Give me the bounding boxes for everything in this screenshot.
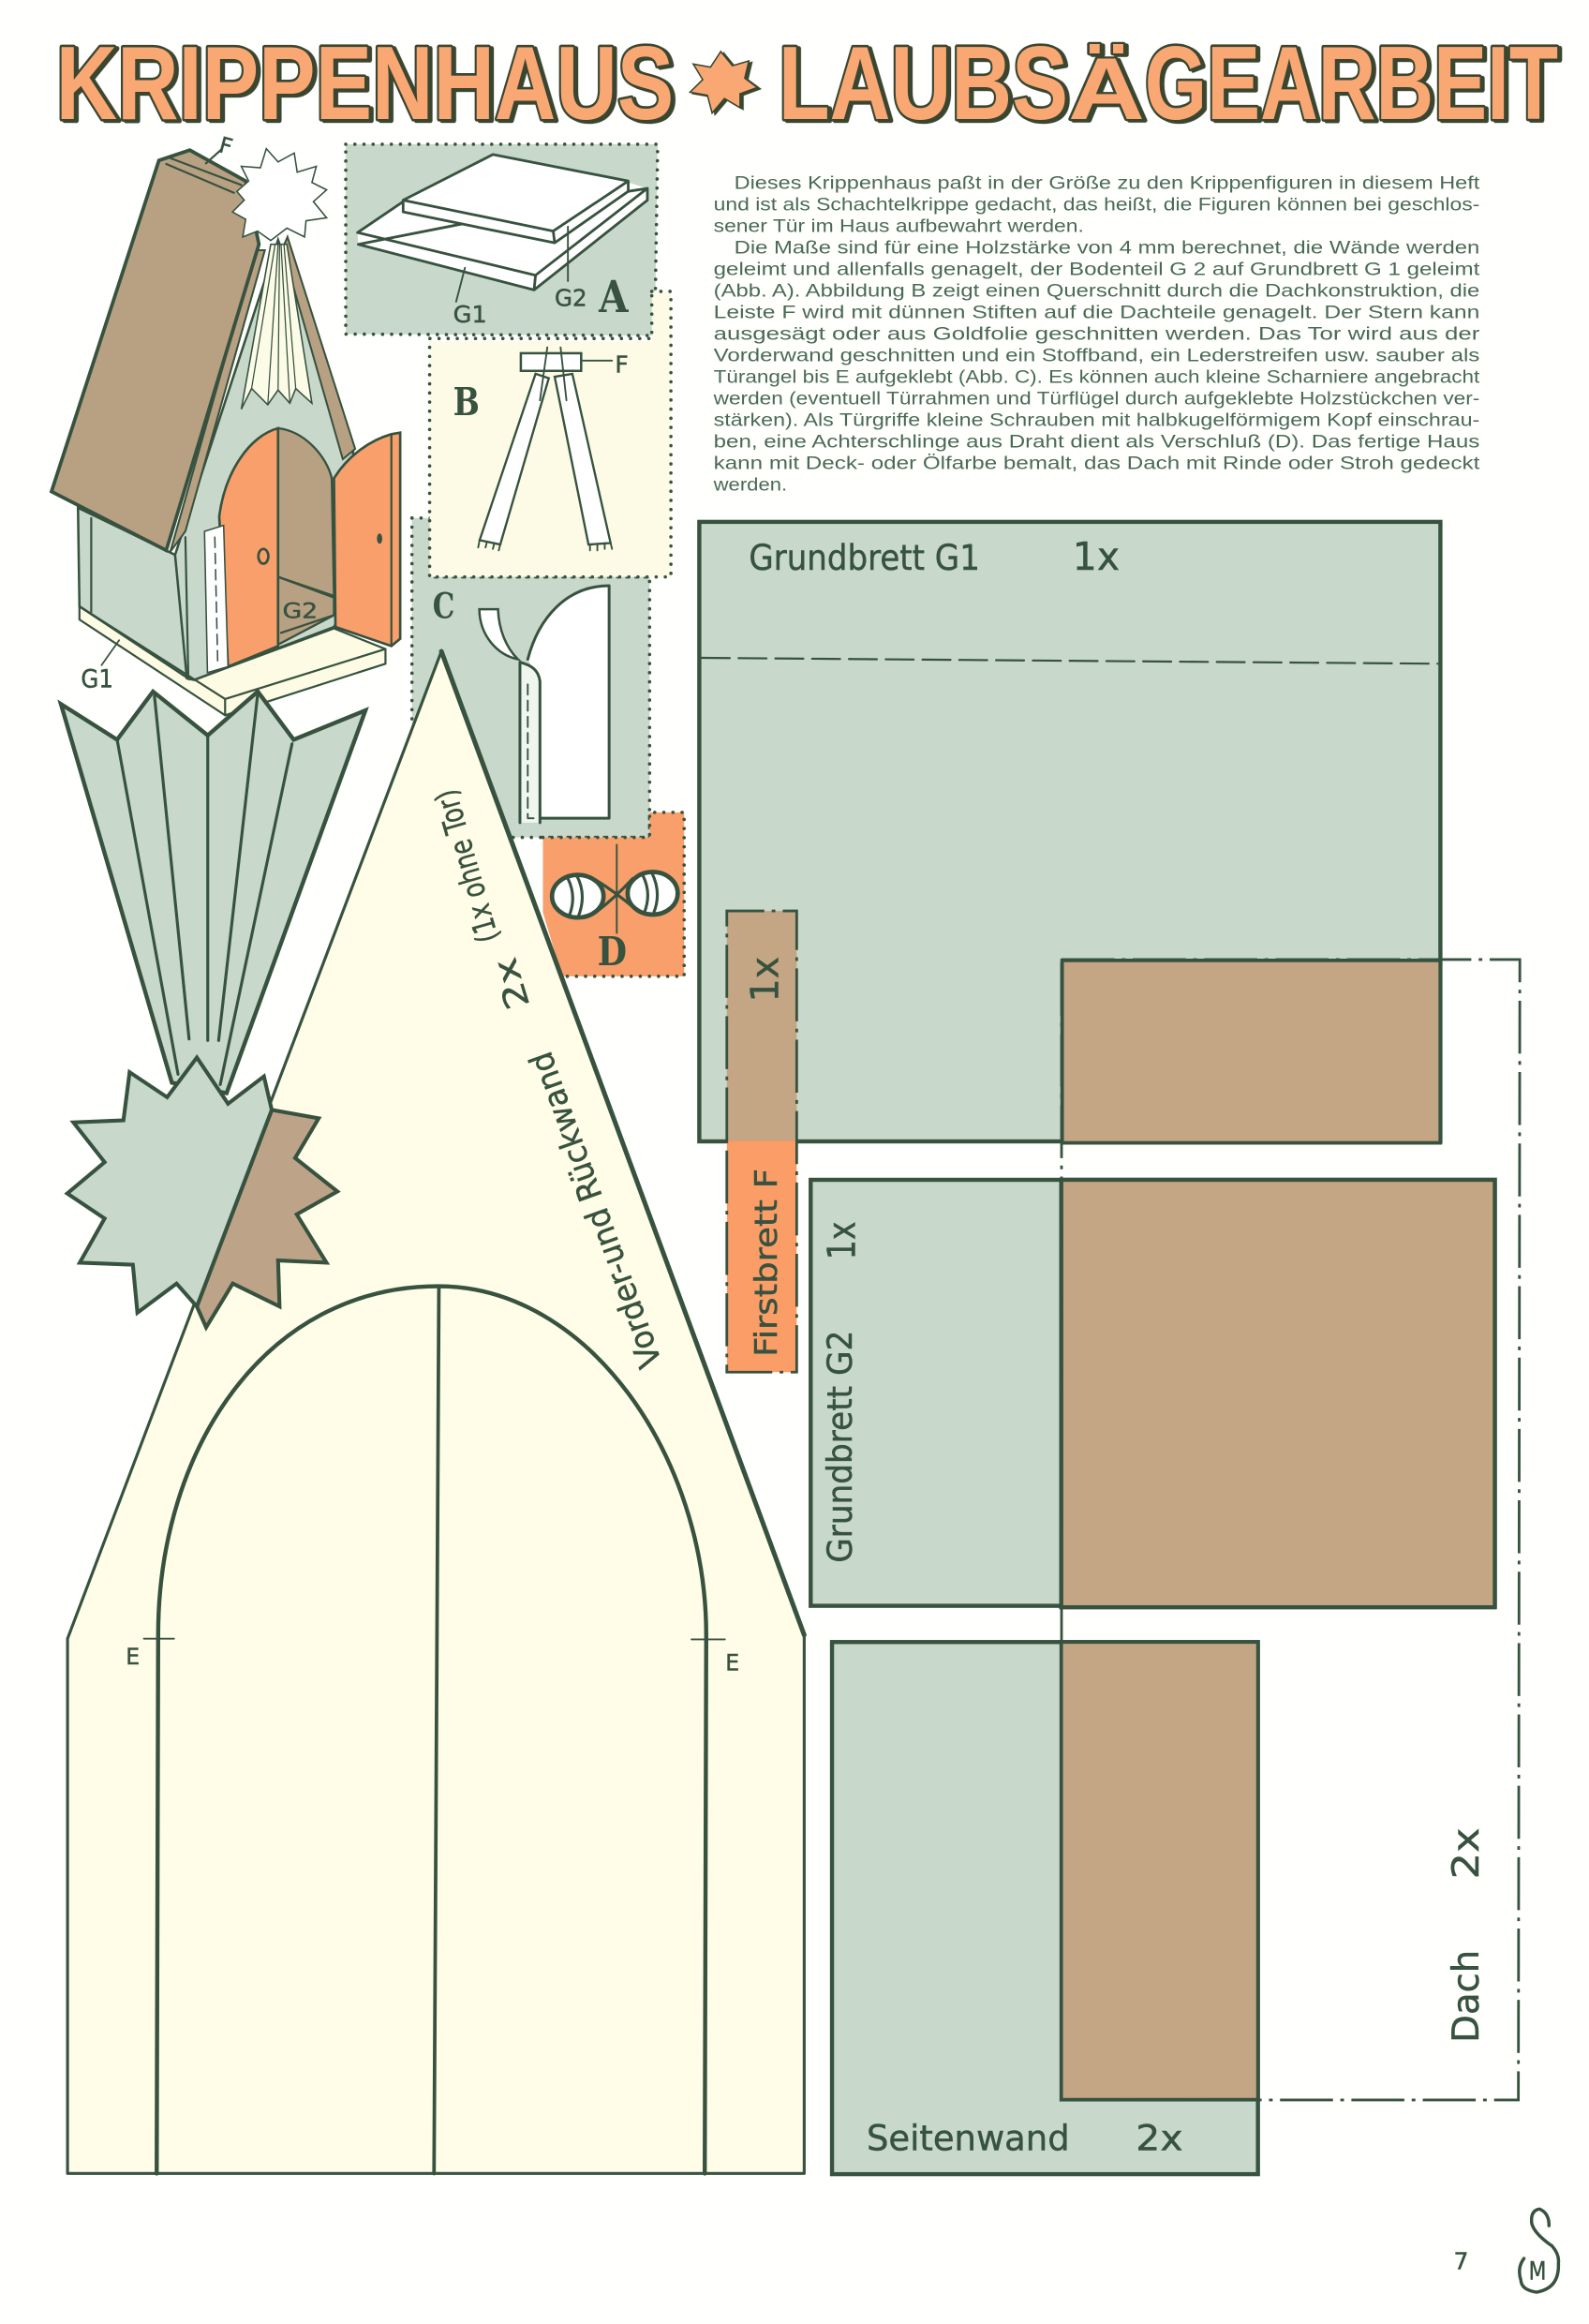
body text: Vorderwand geschnitten und ein Stoffband, ein Lederstreifen usw. sauber als bbox=[714, 346, 1480, 366]
label: G1: G1 bbox=[81, 664, 113, 693]
label: Grundbrett G1: Grundbrett G1 bbox=[749, 537, 980, 578]
brown roof overlap bbox=[1062, 1642, 1258, 2100]
pattern: star bbox=[67, 1058, 337, 1328]
label: 1x: 1x bbox=[1073, 534, 1120, 579]
pattern: Grundbrett G2 bbox=[810, 1180, 1494, 1607]
body text: stärken). Als Türgriffe kleine Schrauben mit halbkugelförmigem Kopf einschrau- bbox=[714, 410, 1479, 431]
label: G2 floor: G2 bbox=[283, 601, 318, 624]
house illustration bbox=[52, 132, 400, 715]
body text: ben, eine Achterschlinge aus Draht dient als Verschluß (D). Das fertige Haus bbox=[714, 432, 1480, 453]
label: 2x: 2x bbox=[1136, 2117, 1183, 2158]
pattern: Seitenwand bbox=[832, 1642, 1258, 2174]
title: KRIPPENHAUS bbox=[56, 24, 674, 142]
title bbox=[56, 24, 1558, 142]
body text: sener Tür im Haus aufbewahrt werden. bbox=[714, 216, 1084, 237]
door knobs bbox=[259, 533, 382, 563]
page number: 7 bbox=[1454, 2248, 1469, 2275]
pattern: fan bbox=[61, 692, 365, 1094]
label: F: F bbox=[216, 132, 235, 160]
body text: (Abb. A). Abbildung B zeigt einen Querschnitt durch die Dachkonstruktion, die bbox=[714, 281, 1479, 302]
left door bbox=[219, 428, 278, 666]
pattern: front and back wall bbox=[67, 651, 804, 2173]
star bbox=[232, 149, 327, 241]
label: 2x: 2x bbox=[487, 953, 538, 1014]
roof bbox=[52, 150, 259, 550]
label: G2: G2 bbox=[555, 285, 587, 312]
panel: illustration D bbox=[542, 812, 684, 976]
label: Seitenwand: Seitenwand bbox=[867, 2117, 1070, 2158]
floor G2 bbox=[278, 577, 334, 645]
body text: werden (eventuell Türrahmen und Türflügel durch aufgeklebte Holzstückchen ver- bbox=[712, 389, 1479, 410]
body text: ausgesägt oder aus Goldfolie geschnitten werden. Das Tor wird aus der bbox=[714, 324, 1480, 345]
panel: illustration C bbox=[412, 518, 649, 838]
label: Grundbrett G2: Grundbrett G2 bbox=[820, 1331, 860, 1563]
body text: geleimt und allenfalls genagelt, der Bodenteil G 2 auf Grundbrett G 1 geleimt bbox=[714, 260, 1480, 280]
panel: illustration A bbox=[346, 144, 658, 335]
front wall bbox=[175, 240, 353, 680]
label: 2x: 2x bbox=[1446, 1827, 1488, 1879]
right door bbox=[334, 433, 400, 646]
body text: Leiste F wird mit dünnen Stiften auf die Dachteile genagelt. Der Stern kann bbox=[714, 303, 1479, 323]
interior bbox=[278, 428, 334, 596]
body text: Türangel bis E aufgeklebt (Abb. C). Es können auch kleine Scharniere angebracht bbox=[714, 367, 1480, 388]
body text bbox=[712, 173, 1480, 495]
label: Dach: Dach bbox=[1446, 1950, 1488, 2043]
label: C: C bbox=[433, 586, 454, 627]
label: B: B bbox=[453, 380, 480, 425]
side wall bbox=[78, 508, 188, 678]
label: G1: G1 bbox=[453, 301, 487, 328]
body text: Dieses Krippenhaus paßt in der Größe zu den Krippenfiguren in diesem Heft bbox=[735, 173, 1480, 194]
label: E left: E bbox=[126, 1644, 140, 1670]
label: 1x: 1x bbox=[819, 1221, 864, 1259]
brown roof overlap bbox=[1062, 961, 1440, 1143]
label: Vorder- und Rückwand: Vorder-und Rückwand bbox=[523, 1047, 670, 1373]
title: Ä bbox=[1068, 40, 1145, 138]
body text: kann mit Deck- oder Ölfarbe bemalt, das Dach mit Rinde oder Stroh gedeckt bbox=[714, 454, 1480, 474]
label: Firstbrett F: Firstbrett F bbox=[748, 1169, 784, 1357]
label: A: A bbox=[598, 272, 630, 323]
panel: illustration B bbox=[430, 291, 671, 577]
pattern: Firstbrett F bbox=[727, 911, 796, 1372]
gable fan bbox=[242, 245, 312, 410]
label: 1x: 1x bbox=[743, 957, 788, 1002]
icon: SM logo: M bbox=[1529, 2257, 1546, 2287]
label: F: F bbox=[615, 350, 629, 378]
label: D: D bbox=[598, 928, 627, 975]
label: E right: E bbox=[725, 1649, 739, 1676]
door arch bbox=[156, 1287, 706, 2173]
pattern: Dach outline bbox=[1062, 960, 1520, 2100]
icon: SM logo bbox=[1520, 2209, 1559, 2292]
front roof strip bbox=[171, 250, 265, 552]
right roof strip bbox=[283, 237, 355, 459]
pattern: Grundbrett G1 bbox=[699, 522, 1440, 1143]
body text: Die Maße sind für eine Holzstärke von 4 mm berechnet, die Wände werden bbox=[735, 238, 1479, 259]
house base G1 bbox=[80, 606, 385, 715]
brown roof overlap bbox=[1062, 1180, 1494, 1607]
body text: werden. bbox=[712, 474, 787, 495]
title: LAUBS bbox=[779, 24, 1068, 142]
hinge strip bbox=[204, 526, 228, 673]
icon: title star bbox=[691, 52, 757, 113]
label: (1x ohne Tor): (1x ohne Tor) bbox=[427, 785, 506, 946]
body text: und ist als Schachtelkrippe gedacht, das heißt, die Figuren können bei geschlos- bbox=[714, 195, 1479, 216]
